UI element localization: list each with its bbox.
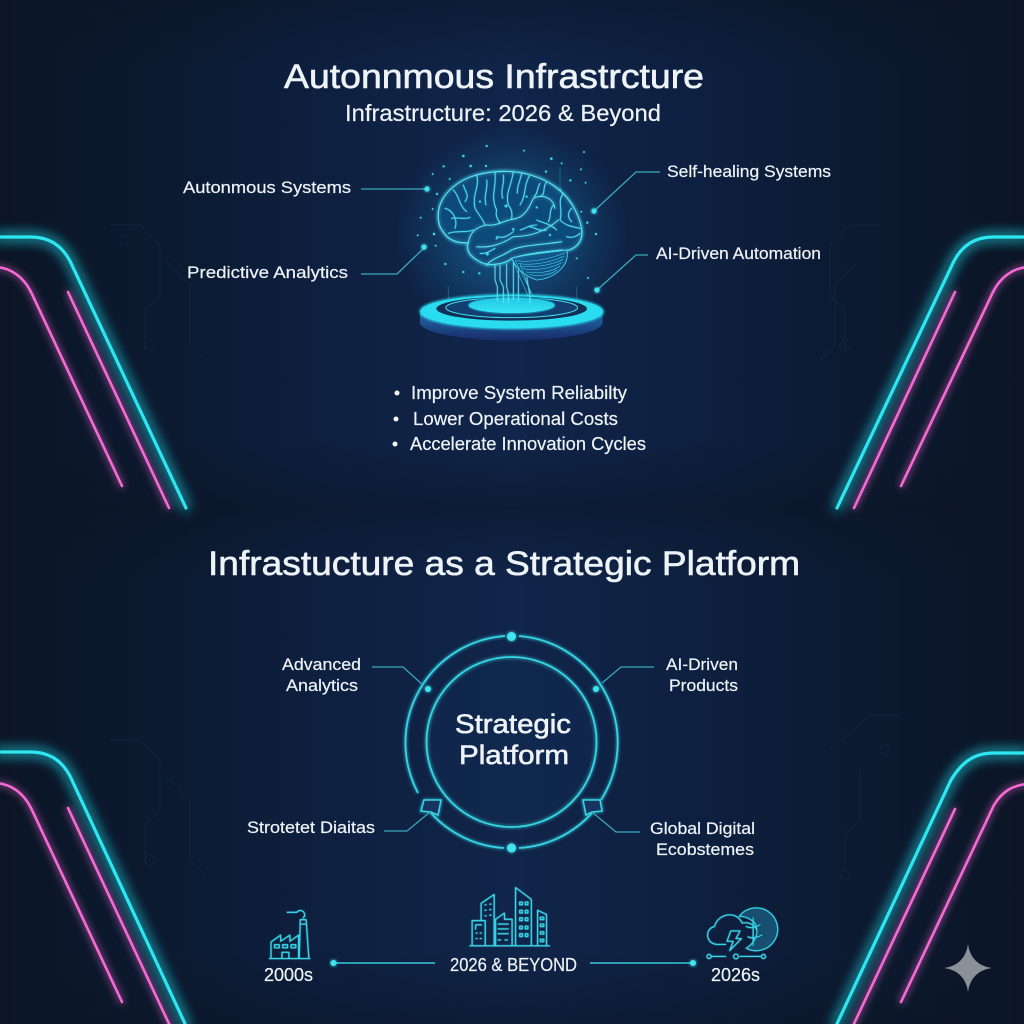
background circuit traces [110,225,900,880]
callout: Autonmous Systems: Autonmous Systems [183,178,351,197]
brain stem circuits [495,262,530,303]
callout: Predictive Analytics: Predictive Analytics [187,263,348,282]
callout: Advanced Analytics [282,655,423,695]
brain sulci detail [445,172,580,253]
title: Autonnmous Infrastrcture [284,58,704,96]
callout: Self-healing Systems [591,162,831,214]
neon lines: bottom right [835,753,1024,1024]
callout: AI-Driven Products: AI-Driven [666,655,738,674]
brain outline and folds [438,171,582,265]
panel: top edge shading [0,0,1024,508]
callout: Advanced Analytics: Advanced [282,655,361,674]
callout: Self-healing Systems: Self-healing Systems [667,162,831,181]
timeline label: 2000s: 2000s [264,965,313,985]
icon: factory [269,911,310,959]
callout: Global Digital Ecobstemes: Global Digital [650,819,755,838]
callout: Advanced Analytics: Analytics [286,676,358,695]
callout: Global Digital Ecobstemes: Ecobstemes [656,840,754,859]
section heading: Infrastucture as a Strategic Platform [208,545,800,583]
callout: Strotetet Diaitas [247,812,430,837]
ring centre label: Strategic [455,709,571,739]
ring centre label [455,709,571,770]
callout: Strotetet Diaitas: Strotetet Diaitas [247,818,375,837]
timeline label: 2026s: 2026s [711,965,760,985]
ring centre label: Platform [459,740,569,770]
benefits bullet list [392,383,646,454]
strategic platform ring diagram [405,632,618,852]
callout: AI-Driven Products [602,655,738,695]
brain hologram illustration [395,127,628,341]
panel: bottom edge shading [0,508,1024,1024]
callout: Predictive Analytics [187,244,427,282]
outer ring arcs [405,636,618,848]
panel: bottom background [0,508,1024,1024]
cerebellum [512,250,567,297]
callout: Global Digital Ecobstemes [592,812,755,859]
neon lines: bottom left [0,752,187,1024]
inner ring [426,657,596,827]
ring arrowheads [421,800,602,815]
benefits bullet list: Accelerate Innovation Cycles [410,434,646,454]
brain halo glow [395,127,628,340]
icon: cloud and globe [707,908,778,959]
platform light beams [448,167,577,300]
callout: AI-Driven Products: Products [669,676,738,695]
holographic platform [420,295,603,341]
neon lines: top right [837,237,1024,508]
icon: city skyline [469,888,550,946]
icon: four-point star watermark [944,944,992,992]
benefits bullet list: Lower Operational Costs [413,409,618,429]
timeline label: 2026 & BEYOND: 2026 & BEYOND [450,955,577,975]
callout: Autonmous Systems [183,178,430,197]
subtitle: Infrastructure: 2026 & Beyond [345,100,661,126]
ring nodes [425,632,599,852]
floating particles [417,145,597,279]
timeline [264,955,760,985]
callout: AI-Driven Automation: AI-Driven Automation [656,244,821,263]
neon lines: top left [0,237,186,508]
callout: AI-Driven Automation [594,244,821,293]
benefits bullet list: Improve System Reliabilty [411,383,627,403]
panel: top background [0,0,1024,508]
